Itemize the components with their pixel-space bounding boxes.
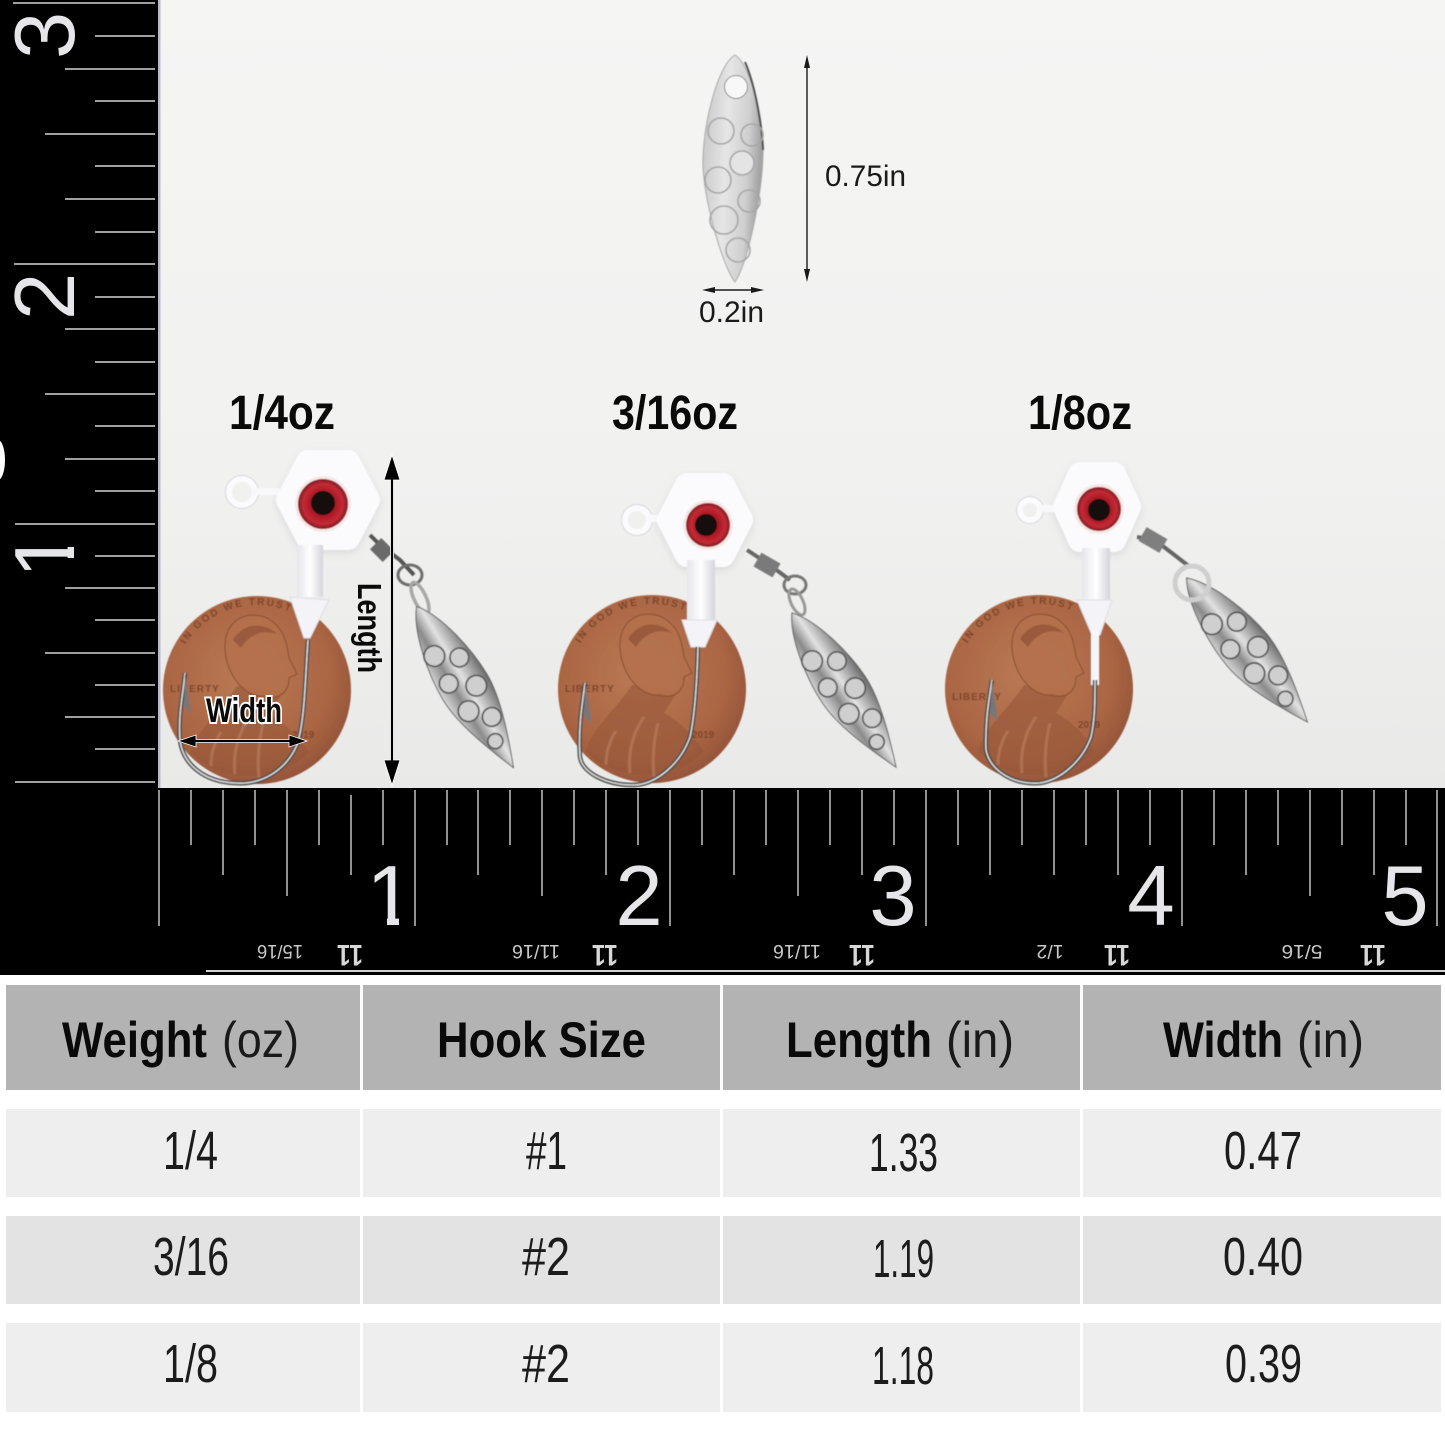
jig 1/4oz with penny: LIBERTY — [170, 684, 220, 695]
spec table — [6, 985, 1441, 1412]
table header row: (oz) — [222, 1012, 299, 1068]
length label: Length — [351, 583, 388, 673]
blade diagram: silver spinner blade — [703, 55, 763, 282]
bottom ruler: 1/2 — [1036, 940, 1064, 961]
table row 1/4: 1/4 — [163, 1121, 218, 1181]
table header row: Width — [1163, 1012, 1283, 1068]
weight label 1/8oz: 1/8oz — [1028, 387, 1132, 440]
table row 3/16: 0.40 — [1223, 1227, 1303, 1287]
photo panel background — [158, 0, 1445, 790]
jig 3/16oz with penny — [557, 474, 898, 788]
width label: Width — [206, 692, 282, 730]
table header row — [6, 985, 1441, 1090]
table row 1/8: 1.18 — [872, 1336, 934, 1396]
table row 3/16: 1.19 — [873, 1229, 934, 1289]
table row 1/8: #2 — [522, 1334, 570, 1394]
bottom ruler: 15/16 — [257, 940, 303, 961]
left ruler: 3 — [0, 12, 93, 59]
bottom ruler: 1 — [366, 849, 414, 944]
jig 1/8oz with penny: IN GOD WE TRUST — [962, 596, 1074, 643]
weight label 1/4oz: 1/4oz — [229, 387, 335, 440]
table header row: (in) — [1297, 1012, 1364, 1068]
bottom ruler: 11 — [1360, 938, 1386, 971]
bottom ruler: 11 — [1104, 938, 1130, 971]
left ruler: 1 — [0, 531, 93, 578]
table row 1/8 — [6, 1323, 1441, 1412]
bottom ruler: 5/16 — [1282, 940, 1322, 961]
table row 1/4: 1.33 — [869, 1123, 938, 1183]
bottom ruler: 5 — [1381, 849, 1429, 944]
length arrow — [384, 455, 400, 785]
width arrow — [178, 735, 307, 747]
bottom ruler: 11/16 — [773, 940, 821, 961]
table header row: (in) — [946, 1012, 1014, 1068]
table row 3/16: 3/16 — [153, 1227, 229, 1287]
bottom ruler — [0, 788, 1445, 975]
left ruler — [0, 0, 160, 790]
bottom ruler: 11 — [592, 938, 618, 971]
bottom ruler: 11 — [849, 938, 875, 971]
jig 3/16oz with penny: IN GOD WE TRUST — [575, 596, 687, 643]
table header row: Length — [786, 1012, 932, 1068]
weight label 3/16oz: 3/16oz — [612, 387, 738, 440]
bottom ruler: 3 — [869, 849, 917, 944]
jig 3/16oz with penny: 2019 — [692, 730, 715, 741]
table row 1/8: 0.39 — [1225, 1334, 1302, 1394]
left ruler: 2 — [0, 273, 93, 320]
table row 1/4: #1 — [526, 1121, 567, 1181]
jig 1/4oz with penny: IN GOD WE TRUST — [180, 598, 292, 644]
blade width arrow — [702, 287, 764, 293]
table header row: Hook Size — [437, 1012, 646, 1068]
bottom ruler: 11 — [337, 938, 363, 971]
bottom ruler: 4 — [1127, 849, 1175, 944]
jig 3/16oz with penny: LIBERTY — [565, 684, 615, 695]
bottom ruler: 11/16 — [512, 940, 560, 961]
table row 1/4: 0.47 — [1224, 1121, 1302, 1181]
bottom ruler: 2 — [615, 849, 663, 944]
table row 3/16 — [6, 1216, 1441, 1304]
blade width label: 0.2in — [699, 296, 764, 329]
jig 1/4oz with penny: 2019 — [292, 730, 315, 741]
jig 1/8oz with penny — [944, 462, 1309, 786]
table row 3/16: #2 — [522, 1227, 570, 1287]
table row 1/8: 1/8 — [163, 1334, 218, 1394]
blade length label: 0.75in — [825, 160, 906, 193]
blade length arrow — [804, 55, 810, 282]
jig 1/8oz with penny: 2019 — [1078, 720, 1101, 731]
jig 1/4oz with penny — [162, 450, 514, 786]
jig 1/8oz with penny: LIBERTY — [952, 692, 1002, 703]
table header row: Weight — [62, 1012, 207, 1068]
table row 1/4 — [6, 1109, 1441, 1197]
